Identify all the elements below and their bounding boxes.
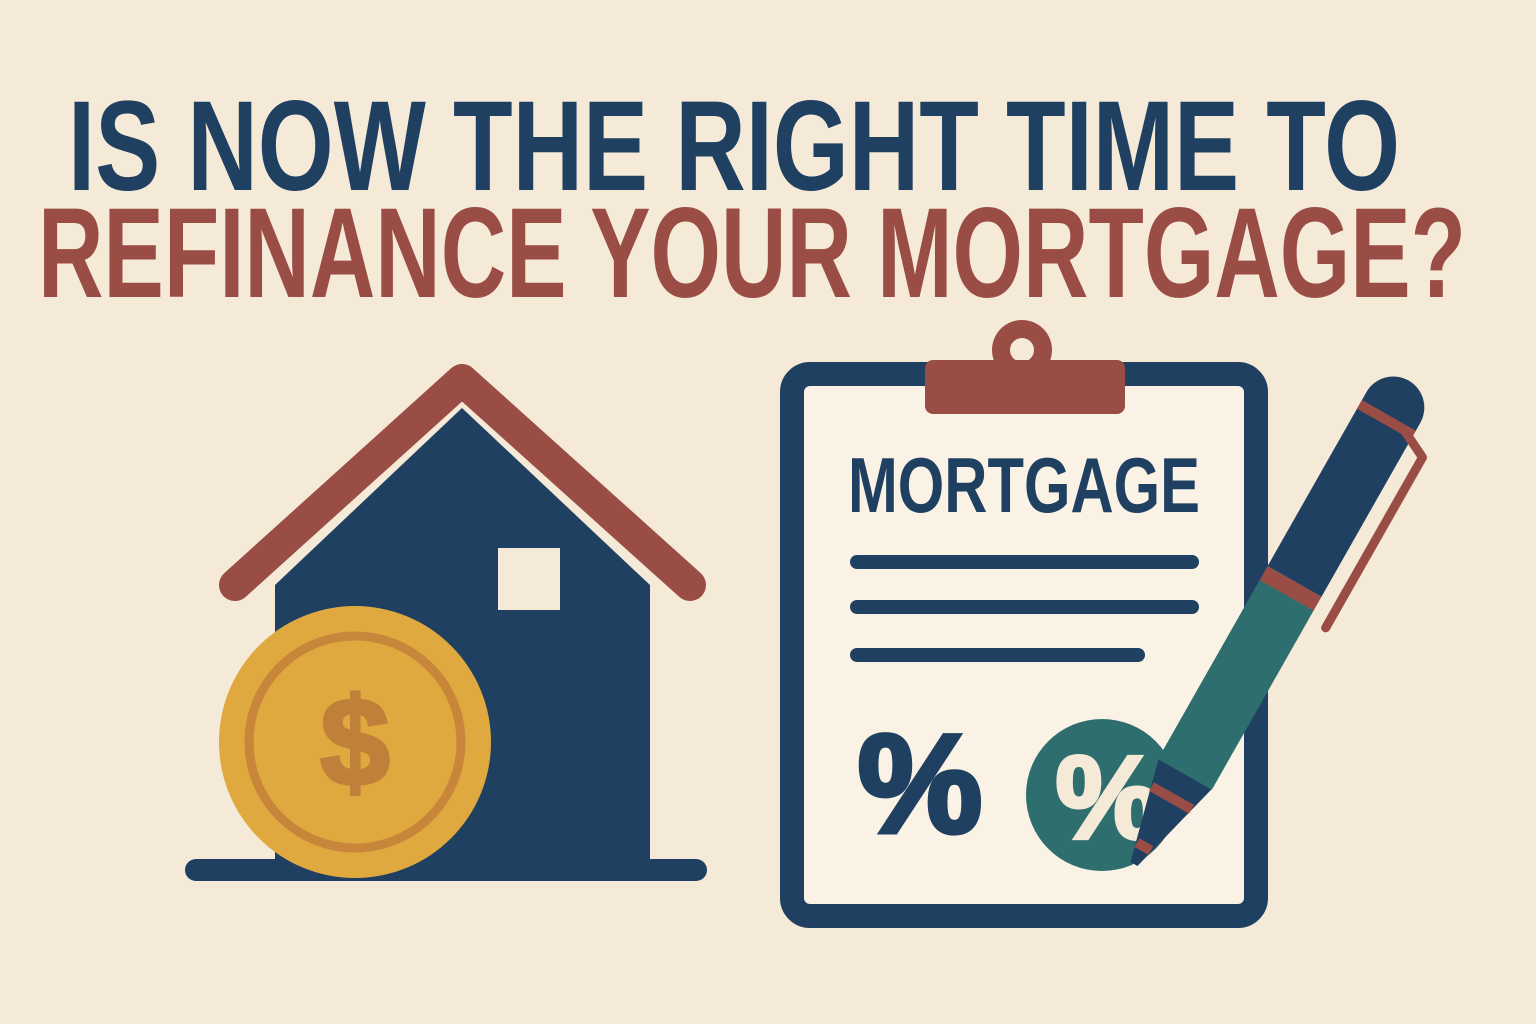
title: [38, 75, 1466, 325]
teal percent badge: %: [1056, 732, 1160, 864]
roof: [235, 380, 690, 585]
coin: [219, 606, 491, 878]
text lines: [857, 562, 1192, 655]
house body: [275, 408, 650, 870]
heading: MORTGAGE: MORTGAGE: [848, 441, 1200, 529]
icon: pen: [1107, 365, 1452, 889]
ground line: [196, 859, 696, 881]
clip: [925, 320, 1125, 414]
coin: $: [321, 674, 389, 812]
percent sign: %: [858, 705, 982, 862]
clipboard: [792, 320, 1256, 916]
teal percent badge: [1026, 719, 1178, 871]
icon: house with coin: [196, 380, 696, 878]
window: [498, 548, 560, 610]
